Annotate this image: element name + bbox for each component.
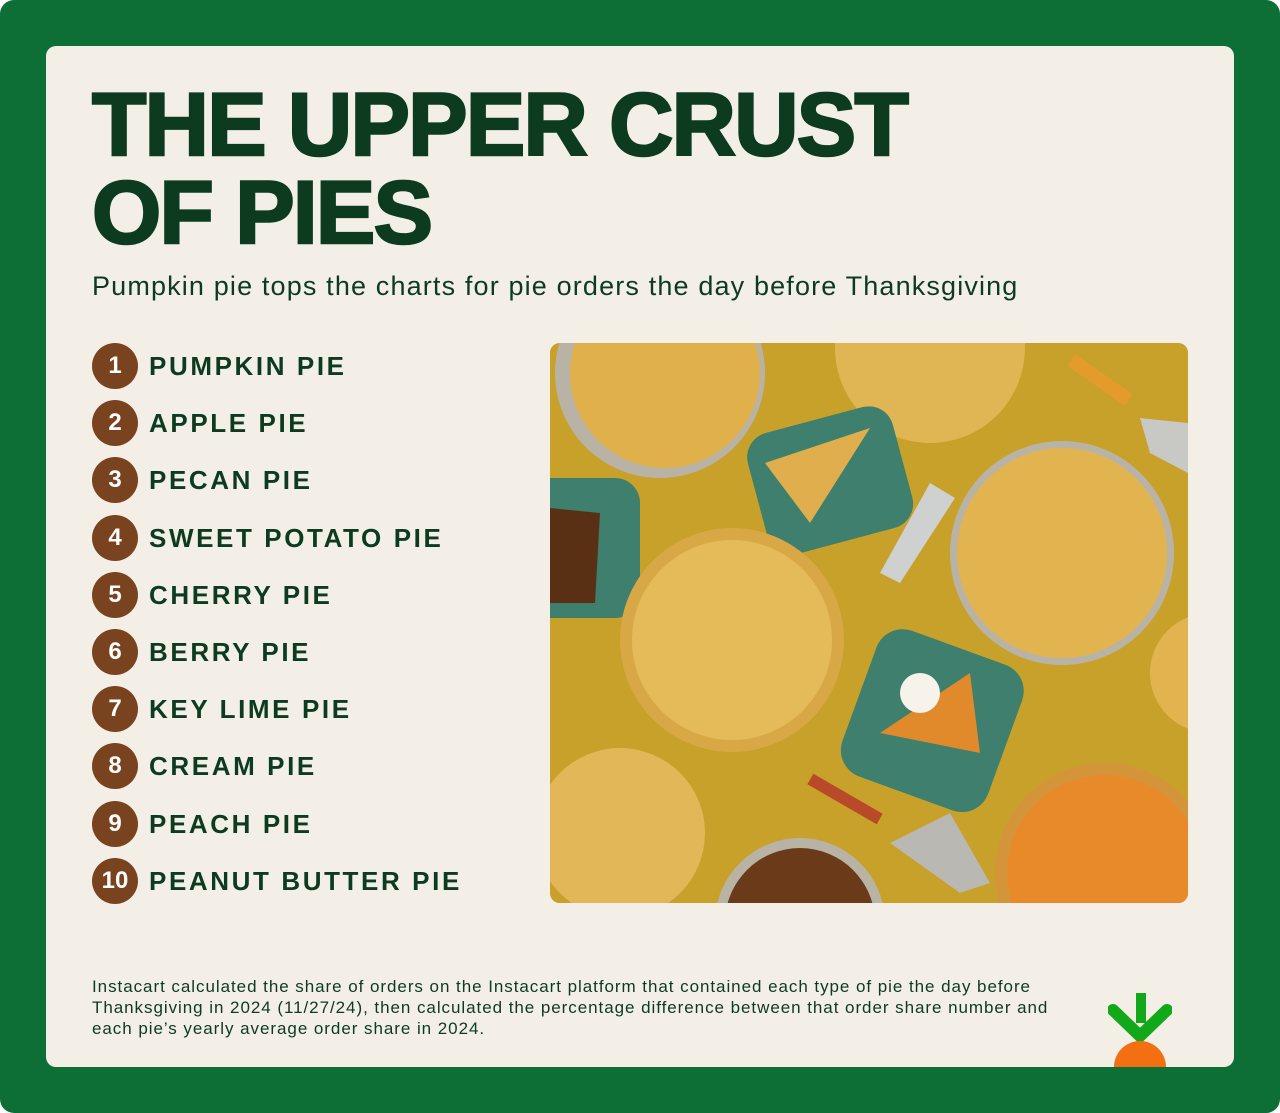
photo of pies [550,343,1188,903]
title: THE UPPER CRUST [92,74,907,174]
item 7: KEY LIME PIE [149,694,352,724]
item 3: 3 [108,466,122,493]
item 8: CREAM PIE [149,751,317,781]
item 1 [92,343,347,389]
item 2: APPLE PIE [149,408,308,438]
item 2: 2 [108,409,122,436]
item 10: 10 [102,867,128,894]
title [92,74,910,262]
title: OF PIES [92,162,431,262]
item 6: BERRY PIE [149,637,311,667]
item 9: 9 [108,810,122,837]
item 5 [92,572,332,618]
item 1: 1 [108,352,122,379]
item 5: CHERRY PIE [149,580,332,610]
footnote: Instacart calculated the share of orders on the Instacart platform that contained each type of pie the day before [92,977,1031,996]
footnote [92,977,1048,1038]
item 6 [92,629,311,675]
item 6: 6 [108,638,122,665]
item 10 [92,858,462,904]
item 3 [92,457,313,503]
item 2 [92,400,308,446]
item 5: 5 [108,581,122,608]
item 8 [92,743,317,789]
footnote: Thanksgiving in 2024 (11/27/24), then calculated the percentage difference between that order share number and [92,998,1048,1017]
item 7 [92,686,352,732]
item 1: PUMPKIN PIE [149,351,347,381]
logo: carrot [1108,993,1172,1067]
item 4: SWEET POTATO PIE [149,523,443,553]
item 8: 8 [108,752,122,779]
item 9 [92,801,313,847]
subtitle: Pumpkin pie tops the charts for pie orders the day before Thanksgiving [92,271,1018,301]
item 4 [92,515,443,561]
item 10: PEANUT BUTTER PIE [149,866,462,896]
item 4: 4 [108,524,122,551]
item 3: PECAN PIE [149,465,313,495]
ranked list [92,343,462,904]
item 9: PEACH PIE [149,809,313,839]
item 7: 7 [108,695,122,722]
footnote: each pie’s yearly average order share in 2024. [92,1019,485,1038]
